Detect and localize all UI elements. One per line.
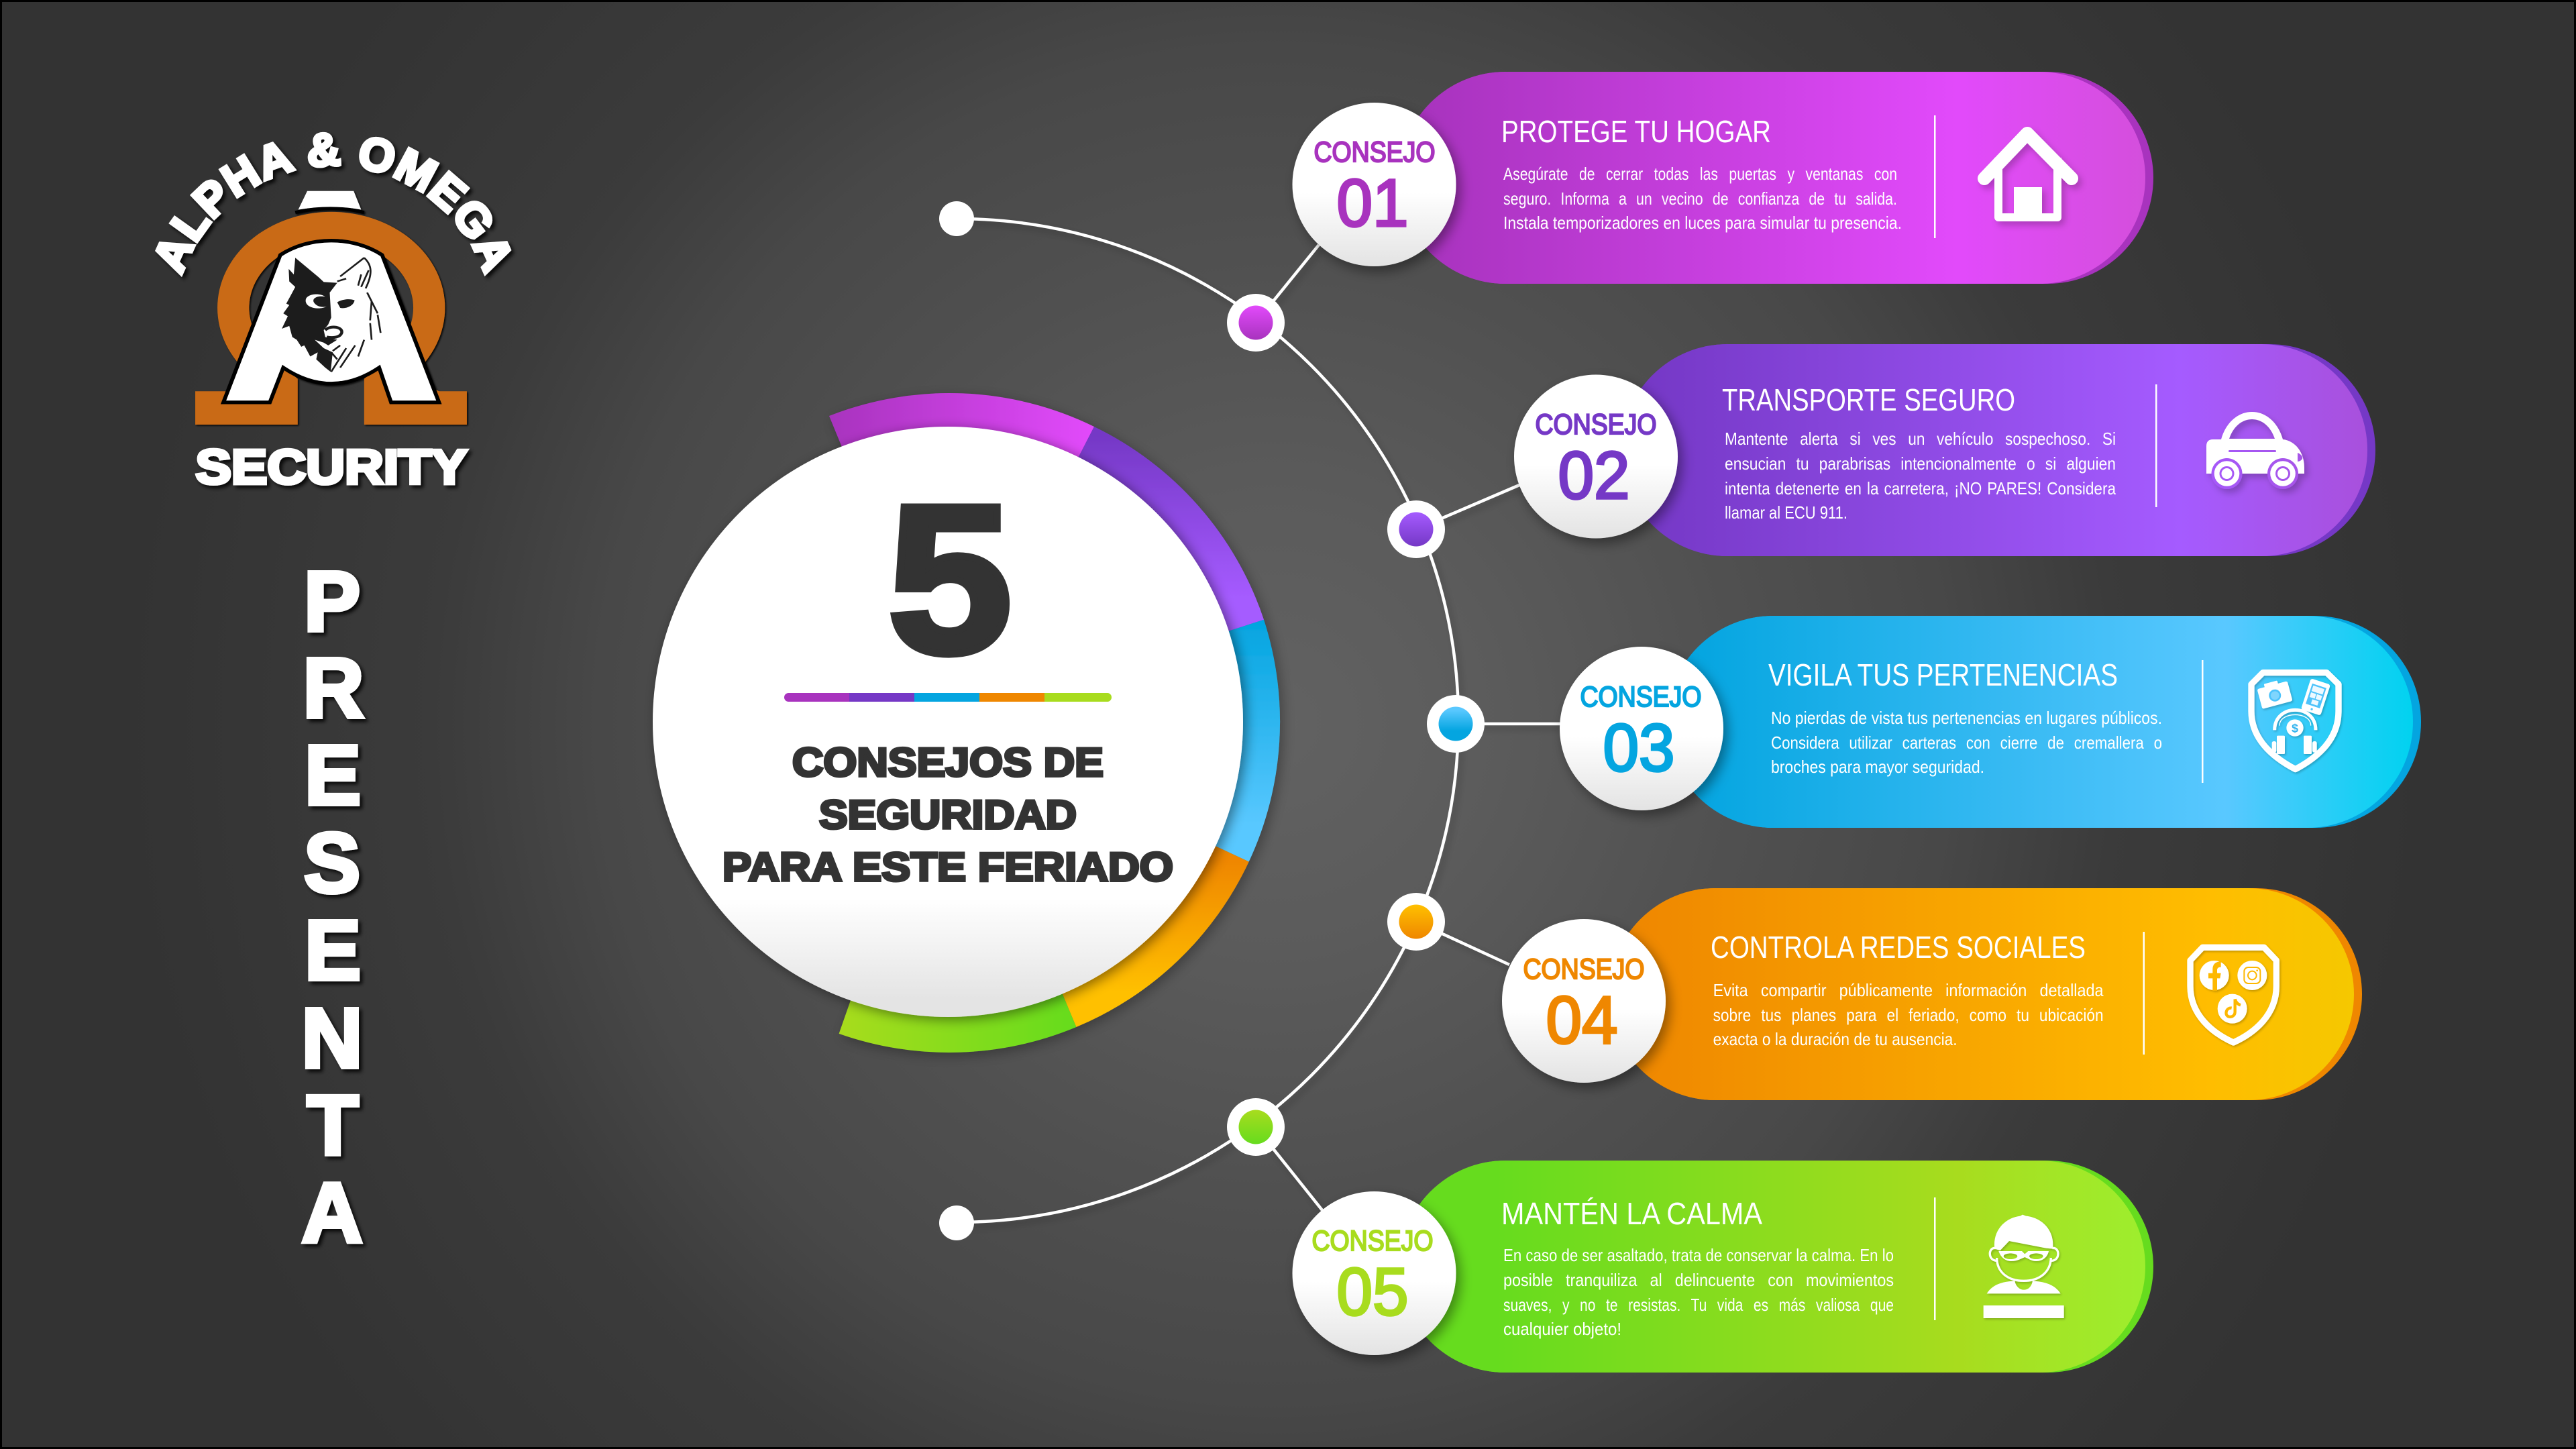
pill 01 (1399, 72, 2153, 284)
logo: Alpha & Omega Security (155, 131, 515, 494)
badge 04: 04 (1546, 983, 1618, 1058)
text 02: intenta detenerte en la carretera, ¡NO PARES! Considera (1725, 478, 2116, 498)
text 02: Mantente alerta si ves un vehículo sospechoso. Si (1725, 429, 2116, 449)
connector 05 (1256, 1127, 1322, 1210)
text 05: cualquier objeto! (1503, 1319, 1621, 1339)
title 05: MANTÉN LA CALMA (1501, 1196, 1762, 1231)
badge 05 (1292, 1191, 1456, 1355)
text 03: No pierdas de vista tus pertenencias en lugares públicos. (1771, 708, 2162, 728)
badge 05: CONSEJO (1312, 1225, 1433, 1257)
timeline node 05 (1227, 1098, 1285, 1156)
badge 03: CONSEJO (1580, 681, 1701, 713)
pill 02 (1621, 344, 2375, 556)
badge 03 (1560, 647, 1723, 810)
text 05: suaves, y no te resistas. Tu vida es más valiosa que (1503, 1295, 1894, 1315)
timeline node 04 (1387, 893, 1445, 951)
title 04: CONTROLA REDES SOCIALES (1711, 930, 2086, 965)
timeline node 01 (1227, 294, 1285, 352)
badge 05: 05 (1336, 1254, 1409, 1330)
icon: house (1984, 133, 2072, 217)
connector 03 (1456, 722, 1563, 725)
badge 03: 03 (1603, 710, 1674, 786)
wolf head (282, 258, 380, 372)
icon: shield with belongings: $ (2292, 721, 2298, 735)
panel: consejo 03 (1560, 616, 2421, 828)
connector 01 (1256, 245, 1319, 323)
title 02: TRANSPORTE SEGURO (1722, 382, 2015, 417)
text 02: ensucian tu parabrisas intencionalmente o si alguien (1725, 453, 2116, 474)
big number 5: 5 (888, 462, 1012, 697)
text 01: seguro. Informa a un vecino de confianza de tu salida. (1503, 189, 1897, 209)
badge 04 (1502, 919, 1666, 1083)
white main circle (653, 427, 1243, 1017)
badge 02: CONSEJO (1535, 409, 1657, 441)
timeline arc (957, 219, 1563, 1222)
title 01: PROTEGE TU HOGAR (1501, 114, 1771, 149)
panel: consejo 04 (1502, 888, 2362, 1100)
logo arched wordmark: ALPHA & OMEGA (155, 131, 515, 280)
colour bar (784, 693, 1112, 702)
text 05 (1503, 1245, 1894, 1339)
panel: consejo 05 (1292, 1161, 2153, 1373)
text 05: posible tranquiliza al delincuente con movimientos (1503, 1270, 1894, 1290)
arc end dot bottom (939, 1205, 974, 1240)
pill 05 (1399, 1161, 2153, 1373)
icon: masked person (1984, 1215, 2064, 1318)
icon: shield with belongings (2251, 673, 2339, 769)
logo wordmark SECURITY: SECURITY (196, 441, 467, 494)
text 05: En caso de ser asaltado, trata de conservar la calma. En lo (1503, 1245, 1894, 1265)
text 01: Asegúrate de cerrar todas las puertas y ventanas con (1503, 164, 1897, 184)
badge 01: CONSEJO (1313, 136, 1436, 168)
text 03: Considera utilizar carteras con cierre de cremallera o (1771, 733, 2162, 753)
text 01 (1503, 164, 1902, 233)
panel: consejo 01 (1292, 72, 2153, 284)
badge 01 (1292, 103, 1456, 266)
text 03 (1771, 708, 2162, 777)
text 04: sobre tus planes para el feriado, como tu ubicación (1713, 1005, 2104, 1025)
text 02: llamar al ECU 911. (1725, 502, 1847, 523)
badge 02 (1514, 374, 1678, 538)
segmented colour ring (829, 393, 1280, 1053)
text 02 (1725, 429, 2116, 523)
icon: shield with social networks (2190, 947, 2276, 1042)
heading (722, 740, 1173, 890)
timeline node 02 (1387, 500, 1445, 558)
heading: CONSEJOS DE (792, 740, 1104, 785)
connector 04 (1416, 922, 1509, 965)
connector 02 (1416, 485, 1519, 529)
badge 02: 02 (1558, 438, 1630, 513)
text 04: Evita compartir públicamente información detallada (1713, 980, 2104, 1000)
central ring and circle (653, 393, 1280, 1053)
heading: PARA ESTE FERIADO (722, 845, 1173, 890)
text 04 (1713, 980, 2104, 1049)
pill 04 (1609, 888, 2362, 1100)
timeline node 03 (1427, 695, 1485, 753)
heading: SEGURIDAD (819, 792, 1077, 837)
vertical title PRESENTA: PRESENTA (302, 554, 364, 1260)
icon: car (2206, 412, 2304, 489)
text 03: broches para mayor seguridad. (1771, 757, 1984, 777)
text 04: exacta o la duración de tu ausencia. (1713, 1029, 1957, 1049)
badge 04: CONSEJO (1523, 953, 1645, 985)
arc end dot top (939, 201, 974, 236)
title 03: VIGILA TUS PERTENENCIAS (1768, 657, 2118, 692)
text 01: Instala temporizadores en luces para simular tu presencia. (1503, 213, 1902, 233)
pill 03 (1667, 616, 2421, 828)
badge 01: 01 (1336, 166, 1409, 241)
panel: consejo 02 (1514, 344, 2375, 556)
logo omega and wolf emblem (195, 191, 467, 425)
